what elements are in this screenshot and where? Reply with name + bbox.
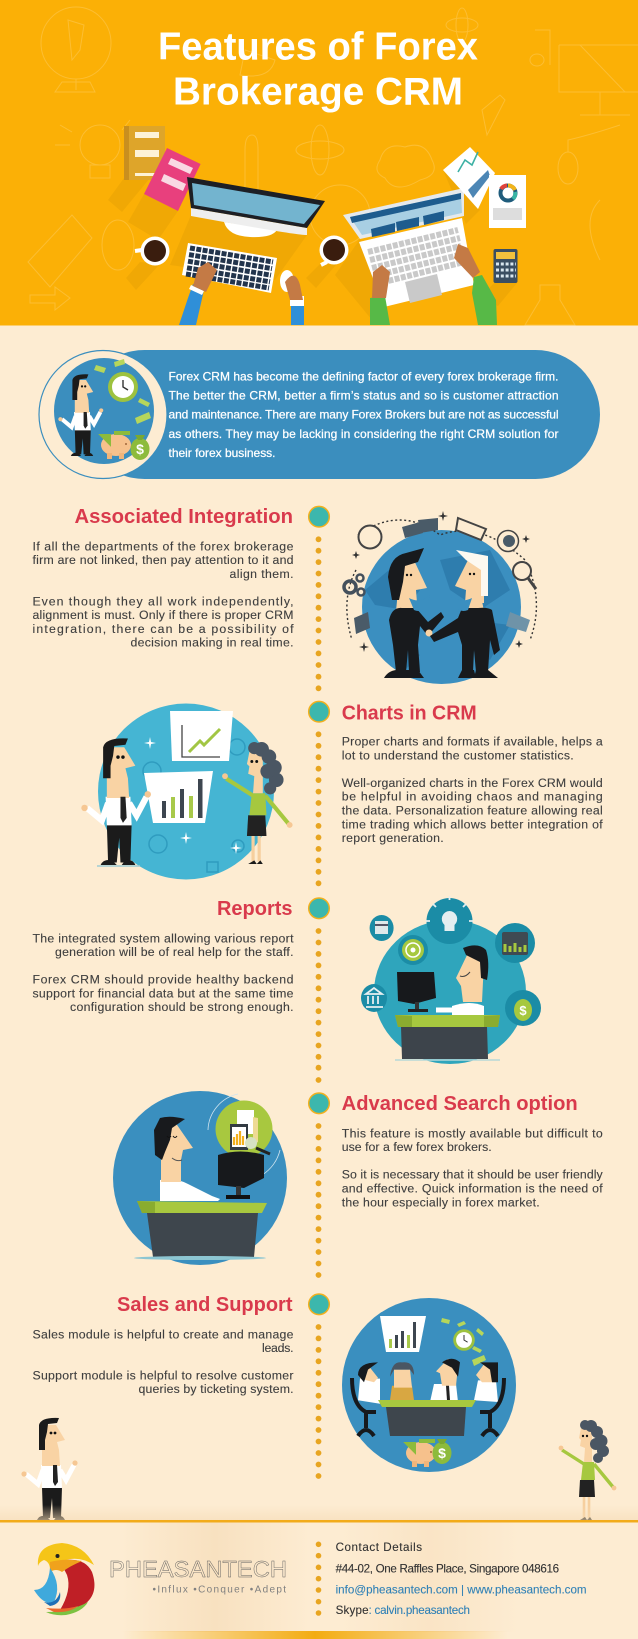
- section: Charts in CRM text: the data. Personalization feature allowing real: [342, 803, 603, 817]
- section: Sales and Support text: queries by ticketing system.: [138, 1382, 294, 1396]
- icon: pink book: [144, 148, 201, 211]
- section: Sales and Support text: [32, 1294, 294, 1396]
- section: Associated Integration text: align them.: [230, 567, 294, 581]
- panel: footer: [0, 1505, 638, 1639]
- illustration: reports desk with icons: $: [519, 1003, 527, 1018]
- chairs: [352, 1378, 504, 1436]
- section: Associated Integration text: Associated Integration: [74, 506, 293, 528]
- section: Advanced Search option text: Advanced Search option: [342, 1093, 578, 1115]
- icon: man with clock and money: [39, 350, 167, 478]
- section: Charts in CRM text: report generation.: [342, 831, 444, 845]
- panel: intro pill: [39, 350, 600, 479]
- advanced search person: [154, 1117, 220, 1201]
- logo: wordmark: [109, 1556, 287, 1596]
- section: Advanced Search option text: use for a few forex brokers.: [342, 1140, 492, 1154]
- section: Reports text: [32, 898, 294, 1014]
- section: Associated Integration text: If all the departments of the forex brokerage: [32, 539, 294, 553]
- icon: right hands on laptop: [370, 244, 497, 325]
- title: Brokerage CRM: [173, 70, 463, 114]
- intro text: Forex CRM has become the defining factor of every forex brokerage firm.: [168, 370, 558, 384]
- section: Charts in CRM text: [342, 702, 603, 845]
- logo: wordmark: •Influx •Conquer •Adept: [152, 1584, 286, 1596]
- section: Charts in CRM text: Proper charts and formats if available, helps a: [342, 735, 603, 749]
- logo: wordmark: PHEASANTECH: [109, 1556, 287, 1582]
- icon: chart papers: [443, 147, 526, 228]
- icon: calculator: [494, 249, 518, 283]
- section: Associated Integration text: integration, there can be a possibility of: [32, 622, 294, 636]
- section: Associated Integration text: firm are not linked, then pay attention to it and: [32, 553, 294, 567]
- section: Reports text: generation will be of real help for the staff.: [55, 945, 294, 959]
- section: Associated Integration text: alignment is must. Only if there is proper CRM: [32, 608, 294, 622]
- section: Reports text: support for financial data but at the same time: [32, 986, 294, 1000]
- icon: left hands with mouse: [179, 262, 304, 325]
- right businessman: [430, 550, 500, 678]
- section: Associated Integration text: decision making in real time.: [130, 636, 294, 650]
- section: Charts in CRM text: Charts in CRM: [342, 702, 477, 724]
- section: Sales and Support text: Sales and Support: [117, 1294, 293, 1316]
- icon: tan binder: [124, 126, 165, 180]
- section: Reports text: The integrated system allowing various report: [32, 931, 294, 945]
- section: Advanced Search option text: the hour especially in forex market.: [342, 1195, 540, 1209]
- panel: header banner: [0, 0, 638, 326]
- icon: laptop: [343, 188, 474, 307]
- section: Sales and Support text: Support module is helpful to resolve customer: [32, 1369, 294, 1383]
- section: Advanced Search option text: So it is necessary that it should be user friendly: [342, 1168, 604, 1182]
- section: Sales and Support text: leads.: [262, 1341, 294, 1355]
- section: Charts in CRM text: be helpful in avoiding chaos and managing: [342, 790, 603, 804]
- section: Reports text: Reports: [217, 898, 292, 920]
- intro text: The better the CRM, better a firm’s status and so is customer attraction: [168, 388, 558, 402]
- illustration: standing man: [21, 1418, 78, 1520]
- contact details: info@pheasantech.com | www.pheasantech.com: [336, 1584, 587, 1596]
- reports man: [436, 945, 488, 1035]
- intro text: their forex business.: [168, 446, 276, 460]
- logo: parrot: [34, 1543, 94, 1615]
- background doodles: [28, 7, 638, 325]
- section: Reports text: Forex CRM should provide healthy backend: [32, 973, 294, 987]
- section: Reports text: configuration should be strong enough.: [70, 1000, 294, 1014]
- seated people: [358, 1359, 498, 1404]
- illustration: sales team meeting: [342, 1298, 516, 1472]
- title: [158, 26, 479, 114]
- intro text: [168, 370, 558, 460]
- icon: desktop monitor: [187, 177, 325, 237]
- icon: keyboard: [182, 243, 277, 293]
- footer dots: [316, 1542, 321, 1616]
- section: Charts in CRM text: time trading which allows better integration of: [342, 817, 603, 831]
- section: Charts in CRM text: Well-organized charts in the Forex CRM would: [342, 776, 603, 790]
- contact details: [336, 1541, 587, 1617]
- contact details: Contact Details: [336, 1541, 422, 1554]
- contact details: #44-02, One Raffles Place, Singapore 048616: [336, 1562, 559, 1576]
- intro text: and maintenance. There are many Forex Brokers but are not as successful: [168, 408, 558, 422]
- illustration: charts with man and woman: [81, 704, 293, 880]
- illustration: reports desk with icons: [361, 896, 541, 1064]
- title: Features of Forex: [158, 26, 479, 68]
- section: Sales and Support text: Sales module is helpful to create and manage: [32, 1327, 294, 1341]
- illustration: handshake on globe: [344, 511, 536, 684]
- section: Charts in CRM text: lot to understand the customer statistics.: [342, 748, 574, 762]
- section: Advanced Search option text: This feature is mostly available but difficult to: [342, 1126, 603, 1140]
- section: Associated Integration text: Even though they all work independently,: [32, 594, 294, 608]
- icon: coffee cups: [135, 236, 348, 266]
- section: Associated Integration text: [32, 506, 294, 650]
- illustration: advanced search man: [113, 1091, 287, 1265]
- section: Advanced Search option text: and effective. Quick information is the need of: [342, 1181, 603, 1195]
- long shadows: [108, 170, 517, 320]
- left businessman: [384, 548, 444, 678]
- contact details: : calvin.pheasantech: [368, 1604, 470, 1617]
- timeline: [309, 506, 329, 1479]
- section: Advanced Search option text: [342, 1093, 604, 1209]
- intro text: as others. They may be lacking in considering the right CRM solution for: [168, 427, 558, 441]
- illustration: standing woman: [559, 1420, 616, 1520]
- contact details: Skype: [336, 1604, 369, 1617]
